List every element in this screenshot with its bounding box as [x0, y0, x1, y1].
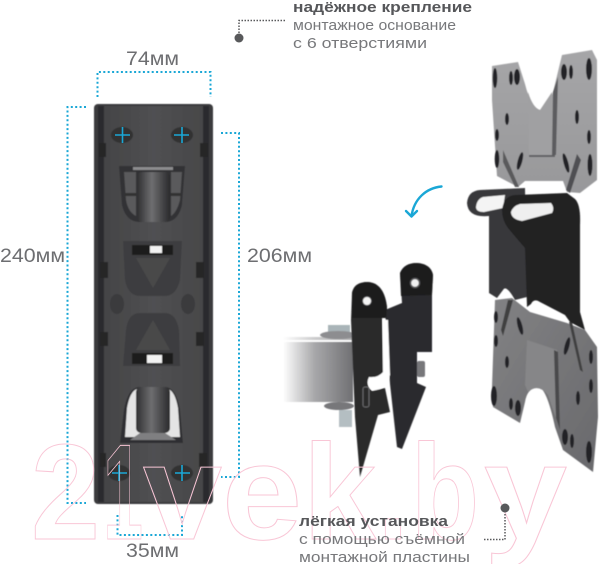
- watermark: v: [143, 416, 222, 564]
- watermark: 1: [103, 416, 143, 564]
- label: 74 mm: 74мм: [126, 49, 179, 70]
- dimension bracket: 35 mm: [118, 515, 182, 535]
- panel: tilt arm and removable plate photo: [283, 263, 433, 477]
- callout: easy installation: лёгкая установка: [299, 513, 449, 530]
- watermark: k: [303, 416, 376, 564]
- callout: easy installation: с помощью съёмной: [299, 531, 465, 548]
- upper plate: [492, 50, 597, 193]
- back plate: [385, 263, 433, 449]
- lower plate: [492, 298, 598, 472]
- side clips: [99, 143, 208, 467]
- label: 35 mm: 35мм: [126, 541, 179, 562]
- watermark: .: [378, 416, 408, 564]
- front bracket with loop: [502, 193, 585, 330]
- callout pointer: top: [234, 20, 285, 42]
- screw holes: [108, 127, 193, 481]
- callout: reliable mounting: [293, 0, 472, 52]
- callout: reliable mounting: монтажное основание: [293, 17, 456, 34]
- callout: easy installation: [299, 513, 470, 564]
- icon: blue hole crosses: [112, 127, 190, 481]
- watermark: y: [484, 416, 567, 564]
- second cut-out: [123, 241, 182, 296]
- dimension bracket: 206 mm: [221, 133, 239, 477]
- dimension bracket: 240 mm: [68, 107, 86, 503]
- front plate: [351, 282, 390, 477]
- label: 206 mm: 206мм: [247, 246, 312, 267]
- panel: mounting base photo: [94, 104, 213, 504]
- bolts: [320, 325, 356, 427]
- white gap: [368, 320, 390, 390]
- label: 240 mm: 240мм: [0, 246, 65, 267]
- raised strips: [528, 92, 555, 155]
- third cut-out: [123, 313, 180, 366]
- callout: reliable mounting: с 6 отверстиями: [293, 35, 427, 52]
- side ovals: [110, 294, 124, 314]
- watermark: e: [222, 416, 302, 564]
- panel: wall plate photo: [467, 50, 598, 472]
- upper cut-out with cylinder: [119, 166, 185, 222]
- back bracket with loop: [467, 188, 527, 300]
- lower cut-out with cylinder: [120, 387, 183, 443]
- arrow: curved blue: [406, 186, 442, 216]
- watermark: 2: [31, 416, 100, 564]
- plate slots: [491, 58, 593, 463]
- watermark: b: [411, 416, 479, 564]
- arm: [283, 342, 353, 402]
- dimension bracket: 74 mm: [98, 72, 210, 97]
- callout pointer: bottom: [484, 504, 510, 540]
- watermark: [31, 416, 567, 564]
